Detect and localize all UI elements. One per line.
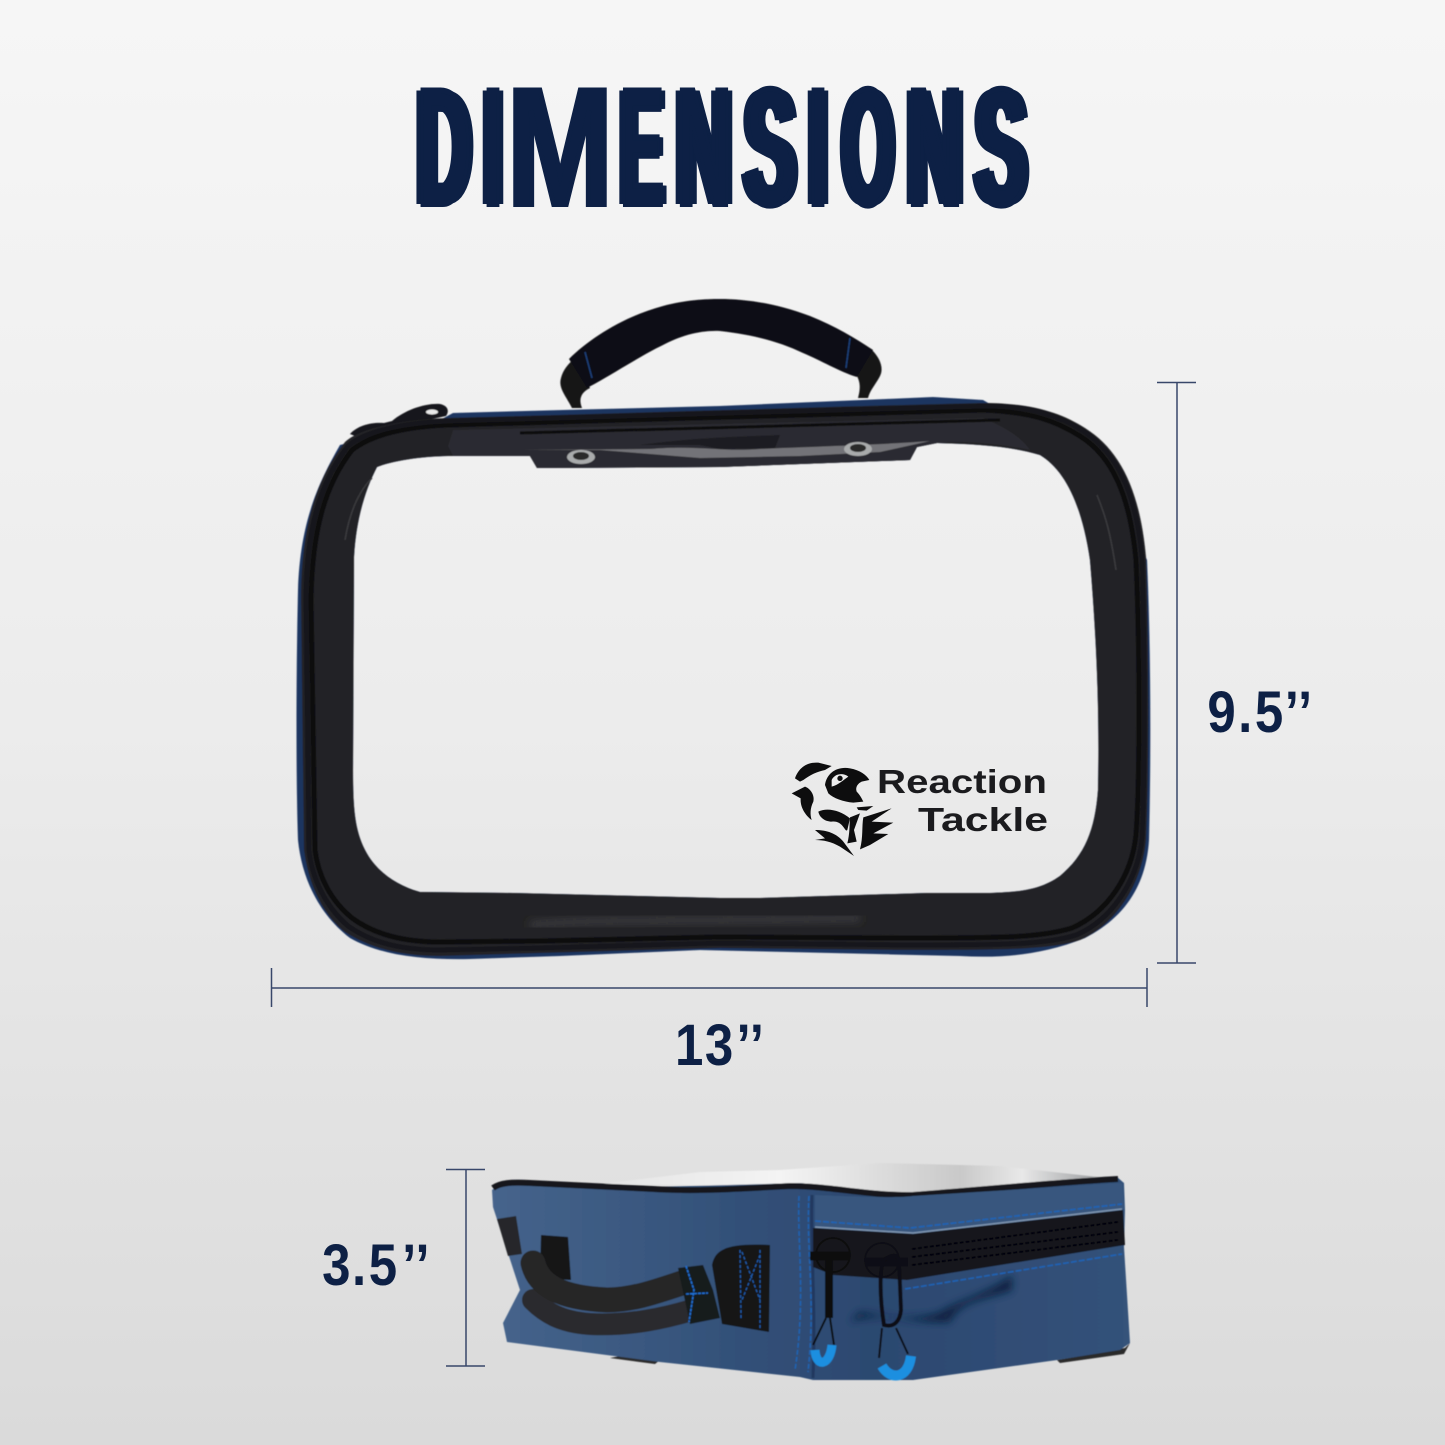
zipper pull left with blue tip	[810, 1238, 850, 1362]
clear top panel	[600, 1163, 1115, 1196]
title: E	[620, 55, 664, 239]
wordmark	[877, 763, 1048, 838]
dark underside slivers	[610, 1343, 1130, 1364]
title: I	[483, 55, 503, 239]
zipper pull right with blue tip	[865, 1243, 911, 1375]
title: N	[676, 55, 732, 239]
navy back panel	[296, 397, 1150, 959]
title: O	[842, 55, 894, 239]
label: 3.5 inches: 3.5’’	[322, 1233, 430, 1298]
icon: leaping bass	[792, 763, 893, 856]
title: S	[744, 55, 796, 239]
frame rim and seam	[306, 406, 1144, 950]
black piping	[493, 1179, 1118, 1195]
product: bag front view	[296, 299, 1150, 959]
navy body	[492, 1177, 1130, 1380]
dimension line: height 9.5	[1157, 382, 1196, 963]
title: D	[417, 55, 471, 239]
product: bag side view	[492, 1163, 1130, 1380]
seam panel stitching	[795, 1195, 814, 1378]
dimension line: width 13	[272, 968, 1147, 1007]
label: 9.5 inches: 9.5’’	[1207, 680, 1312, 745]
top fabric strip with grommets	[448, 418, 1030, 468]
side strap tab	[497, 1216, 522, 1256]
wordmark: Tackle	[918, 801, 1048, 838]
logo: Reaction Tackle	[792, 763, 1048, 856]
carry handle side view	[533, 1235, 770, 1332]
title: M	[507, 55, 613, 239]
title: S	[975, 55, 1027, 239]
title	[416, 55, 1030, 239]
handle	[560, 299, 882, 408]
zipper	[813, 1210, 1125, 1289]
dimension line: depth 3.5	[446, 1170, 485, 1366]
wordmark: Reaction	[877, 763, 1047, 800]
upper zipper flap	[815, 1183, 1124, 1233]
black vinyl frame	[301, 403, 1148, 956]
grommet right	[844, 442, 872, 456]
fold shadow	[850, 1275, 1012, 1322]
title: N	[907, 55, 963, 239]
title: I	[808, 55, 828, 239]
label: 13 inches: 13’’	[675, 1013, 764, 1078]
grommet left	[567, 450, 595, 464]
zipper pull	[350, 404, 448, 438]
